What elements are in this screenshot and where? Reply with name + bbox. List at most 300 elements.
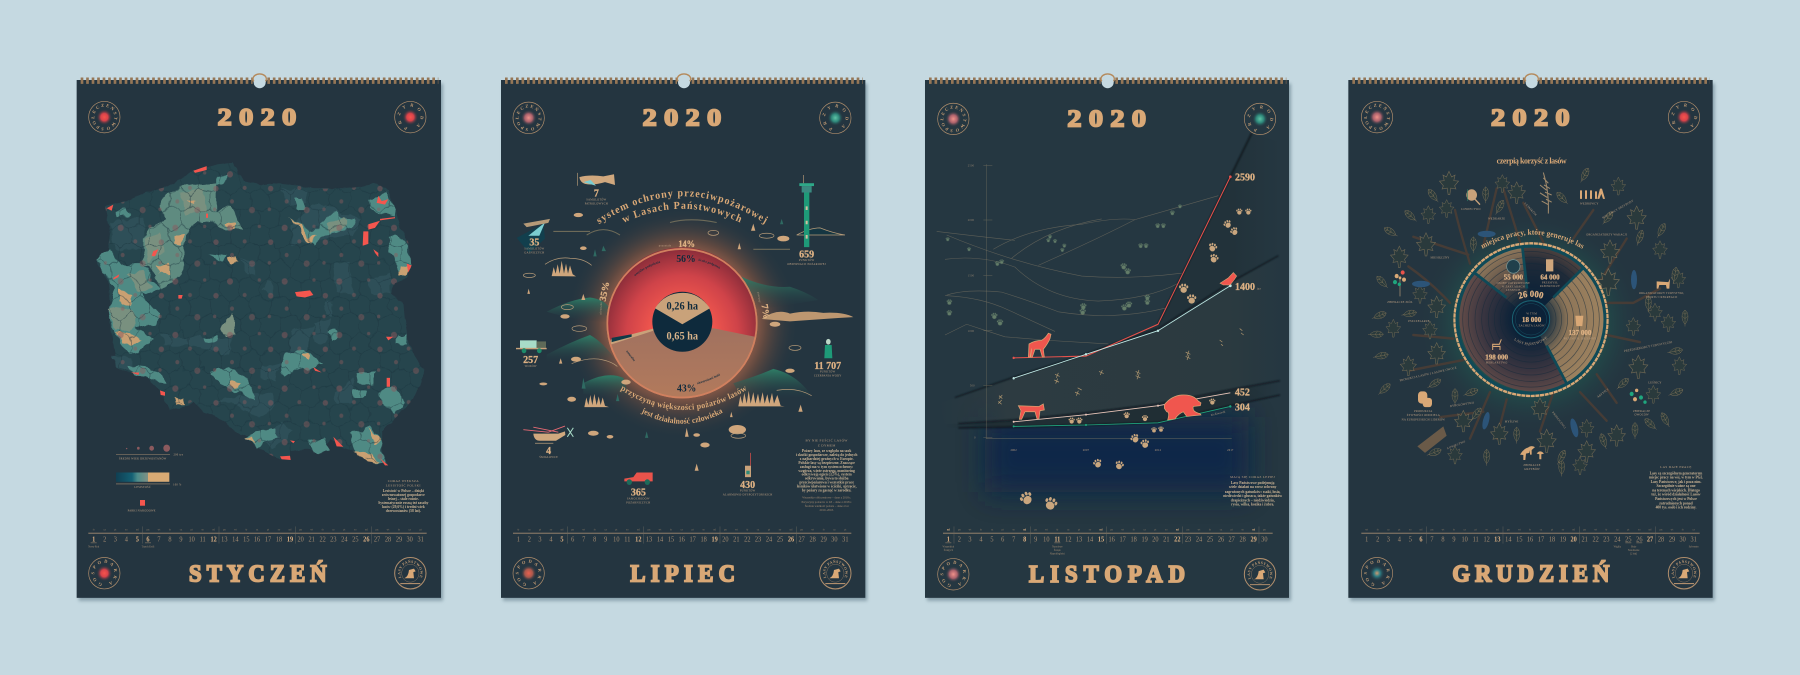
badge: gospodarka: GOSPODARKA xyxy=(91,560,117,586)
logo: Lasy Państwowe xyxy=(1244,558,1276,590)
calendar strip: listopad: pt xyxy=(1154,529,1157,532)
benefit labels: PRODUKCJA xyxy=(1414,409,1433,413)
calendar strip: grudzień: 17 xyxy=(1538,536,1545,543)
text block: coraz większa lesistość Polski: Systematycznie rosną też zasoby xyxy=(378,501,429,505)
calendar strip: styczeń: 23 xyxy=(330,536,337,543)
calendar strip: listopad: nd xyxy=(1252,529,1256,532)
labels: outer percentages xyxy=(598,239,771,320)
legend: stand age dots: 200 tys xyxy=(174,453,184,457)
benefit labels: MIŁOŚNICY PRZYRODY xyxy=(1601,197,1635,220)
calendar strip: lipiec: pt xyxy=(539,529,541,532)
benefit labels: ŁOWIECTWO xyxy=(1461,207,1481,211)
text block: coraz większa lesistość Polski: LESISTOŚĆ POLSKI xyxy=(386,482,421,487)
text block: las daje pracę: miejsc pracy na wsi, w tym w PGL xyxy=(1649,475,1703,480)
calendar strip: styczeń: so xyxy=(201,529,204,532)
calendar strip: lipiec: 30 xyxy=(831,536,838,543)
calendar strip: styczeń: pt xyxy=(267,529,269,532)
chart axes: 2012 xyxy=(1155,448,1162,452)
calendar strip: styczeń: so xyxy=(125,529,128,532)
benefit labels: RYBOŁÓWSTWO xyxy=(1450,399,1474,408)
calendar strip: listopad: cz xyxy=(1143,529,1147,532)
month title: LISTOPAD xyxy=(1029,561,1185,588)
legend: national parks: PARKI NARODOWE xyxy=(128,508,156,512)
calendar strip: listopad: pn xyxy=(1034,529,1038,532)
icon: watchtower xyxy=(799,175,814,247)
text block: coraz większa lesistość Polski: zrównoważonej gospodarce xyxy=(382,493,425,497)
calendar strip: listopad: so xyxy=(1165,529,1168,532)
calendar strip: lipiec: wt xyxy=(582,529,585,532)
calendar strip: listopad: nd xyxy=(1100,529,1103,532)
calendar strip: listopad: Narodowe xyxy=(1052,545,1063,549)
calendar strip: grudzień: wt xyxy=(1442,529,1445,532)
calendar strip: grudzień: 31 xyxy=(1691,536,1697,543)
calendar strip: grudzień: so xyxy=(1485,529,1488,532)
donut chart: causes of fires: nieostrożność ludzi xyxy=(697,373,720,384)
stat: 11 707 water points: 11 707 xyxy=(814,361,841,372)
calendar strip: styczeń: cz xyxy=(180,529,183,532)
series: red line 2590 xyxy=(1012,172,1255,359)
calendar strip: lipiec: so xyxy=(550,529,553,532)
text block: by nie puścić lasów z dymem: Pożary lasu, ze względu na szok xyxy=(802,449,852,453)
calendar strip: lipiec: nd xyxy=(637,529,640,532)
logo: Lasy Państwowe: LASY PAŃSTWOWE xyxy=(398,560,423,578)
chart axes: 2500 xyxy=(968,163,975,167)
calendar strip: styczeń: nd xyxy=(136,529,139,532)
text block: mają się coraz lepiej: niedźwiedzi i głuszca, także gatunków xyxy=(1223,494,1282,498)
calendar strip: styczeń: 29 xyxy=(396,536,402,543)
calendar strip: styczeń: wt xyxy=(158,529,161,532)
calendar strip: listopad: so xyxy=(1089,529,1092,532)
calendar strip: grudzień: 24 xyxy=(1614,536,1621,543)
text block: by nie puścić lasów z dymem: zasługi ma w tym system ochrony: xyxy=(800,465,853,469)
text block: by nie puścić lasów z dymem: Średnia wielkość pożaru – dane z lat xyxy=(805,503,849,508)
stat: 659 observation points: PUNKTÓW xyxy=(799,257,814,262)
calendar strip: listopad: 30 xyxy=(1261,536,1268,543)
calendar strip: styczeń: pn xyxy=(147,529,150,532)
calendar strip: listopad: pn xyxy=(1110,529,1114,532)
calendar strip: grudzień: 11 xyxy=(1473,536,1479,543)
calendar strip: styczeń: Trzech Króli xyxy=(142,545,155,549)
calendar strip: styczeń: 31 xyxy=(418,536,424,543)
calendar strip: lipiec: nd xyxy=(713,529,717,532)
benefit labels: ARTYŚCI xyxy=(1596,386,1609,399)
calendar strip: grudzień: 26 xyxy=(1636,536,1643,543)
calendar strip: grudzień: 18 xyxy=(1549,536,1556,543)
benefit labels: ORGANIZATORZY WAKACJI xyxy=(1586,233,1627,237)
badge: przyroda: PRZYRODA xyxy=(822,104,849,131)
text block: las daje pracę: też, że wśród działalność Lasów xyxy=(1651,493,1701,497)
badge: społeczeństwo: SPOŁECZEŃSTWO xyxy=(516,104,542,132)
calendar strip: styczeń: 24 xyxy=(341,536,348,543)
calendar strip: grudzień: nd xyxy=(1572,529,1576,532)
donut chart: causes of fires: naturalne xyxy=(625,349,637,363)
calendar strip: lipiec: 25 xyxy=(777,536,784,543)
heading: year: 2020 xyxy=(1491,105,1577,132)
calendar strip: grudzień: 3 xyxy=(1387,536,1391,543)
benefit labels: PRODUKCJA LASÓW I LASOWE OWOCE xyxy=(1399,364,1457,382)
center: average burned area: 0,65 ha xyxy=(667,330,699,342)
text block: by nie puścić lasów z dymem: BY NIE PUŚCIĆ LASÓW xyxy=(806,437,848,442)
calendar strip: grudzień: śr xyxy=(1605,529,1607,532)
calendar strip: styczeń: wt xyxy=(234,529,237,532)
text block: by nie puścić lasów z dymem: odkrywają ogień (3,5%), system xyxy=(802,473,852,477)
calendar strip: listopad: 21 xyxy=(1163,536,1169,543)
calendar strip: grudzień: 1 xyxy=(1365,536,1368,543)
text block: las daje pracę: Szczególnie ważne są one xyxy=(1656,484,1696,488)
badge: gospodarka: GOSPODARKA xyxy=(1364,560,1390,586)
sector: 198 000: MEBLARSTWO xyxy=(1486,360,1508,365)
calendar strip: listopad: 5 xyxy=(990,536,994,543)
calendar strip: grudzień: so xyxy=(1638,529,1641,532)
icon: firefighter xyxy=(824,339,832,358)
calendar strip: grudzień: nd xyxy=(1496,529,1499,532)
calendar strip: grudzień: Narodzenie xyxy=(1628,549,1640,552)
calendar strip: grudzień xyxy=(1361,526,1700,556)
calendar strip: styczeń: so xyxy=(278,529,281,532)
stat: 11 707 water points: PUNKTÓW xyxy=(820,368,835,374)
calendar strip: styczeń: 10 xyxy=(189,536,196,543)
calendar strip: listopad: 3 xyxy=(968,536,972,543)
calendar strip: grudzień: cz xyxy=(1692,529,1696,532)
chart axes: 0 xyxy=(974,435,976,440)
calendar strip: styczeń: 6 xyxy=(146,536,150,543)
text block: by nie puścić lasów z dymem: Polskie lasy są bezpieczne. Znaczące xyxy=(798,461,855,465)
glow behind chart xyxy=(566,207,799,439)
benefit labels: PSZCZELARZE xyxy=(1408,319,1430,323)
sector: 64 000: PRZEMYSŁ xyxy=(1542,280,1558,285)
text block: coraz większa lesistość Polski: CORAZ WIĘKSZA xyxy=(388,479,419,483)
series: green line 304 xyxy=(1013,402,1250,427)
calendar strip: lipiec: cz xyxy=(757,529,760,532)
text block: coraz większa lesistość Polski: lasów (29,6%) i średni wiek xyxy=(382,505,426,509)
logo: Lasy Państwowe: LASY PAŃSTWOWE xyxy=(1672,560,1696,578)
text block: las daje pracę xyxy=(1649,465,1703,510)
calendar strip: grudzień: 8 xyxy=(1441,536,1445,543)
calendar strip: styczeń: pt xyxy=(343,529,346,532)
legend: stand age dots xyxy=(116,445,184,461)
calendar strip: listopad: pt xyxy=(1078,529,1080,532)
text block: by nie puścić lasów z dymem: Wszystkie obliczeniowe – dane z 2018 r. xyxy=(802,495,851,500)
calendar strip: grudzień: 19 xyxy=(1560,536,1566,543)
curved title: system ochrony: system ochrony przeciwpożarowej xyxy=(597,191,768,225)
calendar strip: styczeń: 9 xyxy=(179,536,183,543)
text block: by nie puścić lasów z dymem: i skutki gospodarcze, należą do jednych xyxy=(796,453,858,457)
calendar strip: lipiec: 28 xyxy=(810,536,817,543)
calendar strip: styczeń: 18 xyxy=(276,536,283,543)
badge: przyroda: PRZYRODA xyxy=(1671,103,1698,130)
stat: 7 patrol planes: PATROLOWYCH xyxy=(585,201,609,205)
calendar strip: grudzień: cz xyxy=(1616,529,1619,532)
calendar strip: listopad: nd xyxy=(1023,529,1027,532)
calendar strip: lipiec: nd xyxy=(790,529,793,532)
calendar strip: lipiec: wt xyxy=(811,529,814,532)
calendar strip: lipiec: pt xyxy=(692,529,694,532)
calendar strip: listopad: śr xyxy=(1209,529,1211,532)
benefit labels: ŁOWIECTWO xyxy=(1447,439,1466,450)
calendar strip: grudzień: śr xyxy=(1682,529,1684,532)
calendar strip: grudzień: 2 xyxy=(1376,536,1379,543)
calendar strip: grudzień: 28 xyxy=(1658,536,1665,543)
calendar strip: lipiec: so xyxy=(626,529,629,532)
tree-trunk chart: jobs by sector xyxy=(1453,242,1609,398)
sector: 55 000: OSOBY ZATRUDNIONE xyxy=(1497,281,1530,285)
benefit labels: ZBIERACZE ZIÓŁ xyxy=(1387,299,1413,304)
calendar strip: styczeń: 5 xyxy=(136,536,140,543)
calendar strip: grudzień: wt xyxy=(1671,529,1674,532)
icon: small wolf xyxy=(1220,272,1237,285)
icon: mushrooms xyxy=(1520,446,1544,460)
calendar strip: styczeń: 19 xyxy=(287,536,294,543)
page sheet with spiral binding xyxy=(501,74,867,601)
stat: 35 firefighting planes: 35 xyxy=(529,237,539,249)
stat: 4 helicopters: ŚMIGŁOWCE xyxy=(539,454,558,459)
calendar strip: lipiec: pn xyxy=(571,529,575,532)
benefit labels: MIESIĘCZNY xyxy=(1430,255,1450,260)
calendar strip: lipiec: 7 xyxy=(582,536,586,543)
sector: 55 000 xyxy=(1497,260,1530,292)
calendar strip: grudzień: pt xyxy=(1398,529,1401,532)
panel: calendar page listopad (wildlife populations) xyxy=(925,73,1293,602)
chart axes: 2002 xyxy=(1010,448,1017,452)
calendar strip: grudzień: pt xyxy=(1475,529,1477,532)
series: cyan line 1400: 1400 xyxy=(1235,282,1255,293)
text block: las daje pracę: Lasy Państwowe, jak i poza nim. xyxy=(1651,480,1701,484)
month title: GRUDZIEŃ xyxy=(1452,561,1609,588)
calendar strip: listopad: wt xyxy=(1198,529,1201,532)
calendar strip: listopad: wt xyxy=(969,529,972,532)
calendar strip: lipiec: 9 xyxy=(604,536,607,543)
calendar strip: listopad: 17 xyxy=(1120,536,1127,543)
badge: społeczeństwo: SPOŁECZEŃSTWO xyxy=(940,106,966,132)
calendar strip: styczeń: 21 xyxy=(309,536,315,543)
calendar strip: listopad: 23 xyxy=(1185,536,1192,543)
small cross tracks xyxy=(998,329,1244,404)
page sheet with spiral binding xyxy=(77,74,443,601)
branches xyxy=(1408,189,1660,439)
calendar strip: grudzień: śr xyxy=(1377,529,1379,532)
calendar strip: lipiec: 31 xyxy=(842,536,848,543)
calendar strip: listopad: 6 xyxy=(1001,536,1005,543)
stat: 430 dispatch points xyxy=(723,480,773,496)
stat: 659 observation points: 659 xyxy=(799,249,814,261)
calendar strip: styczeń: pn xyxy=(223,529,226,532)
text block: by nie puścić lasów z dymem: odkrywania, bywa to służba xyxy=(805,477,849,481)
calendar strip: styczeń: nd xyxy=(365,529,368,532)
calendar strip: listopad: 15 xyxy=(1098,536,1105,543)
calendar strip: styczeń: cz xyxy=(332,529,335,532)
calendar strip: styczeń: śr xyxy=(93,529,95,532)
calendar strip: styczeń: Nowy Rok xyxy=(88,545,100,549)
stat: 365 patrol vehicles: POŻARNICZYCH xyxy=(626,499,651,505)
text block: mają się coraz lepiej xyxy=(1223,475,1282,507)
donut chart: causes of fires: 43% xyxy=(677,383,696,395)
series: cyan line 1400 xyxy=(1012,282,1261,379)
faint footprints xyxy=(946,204,1182,325)
calendar strip: grudzień: pn xyxy=(1507,529,1510,532)
donut chart: causes of fires: 56% xyxy=(676,254,696,265)
series: green line 304: niedźwiedź xyxy=(1210,409,1226,417)
calendar strip: lipiec: pt xyxy=(768,529,770,532)
logo: Lasy Państwowe xyxy=(1668,557,1700,590)
calendar strip: grudzień: Sylwester xyxy=(1689,545,1699,549)
sector: 137 000 xyxy=(1564,316,1597,340)
calendar strip: styczeń: 14 xyxy=(232,536,239,543)
icon: hikers xyxy=(1580,189,1605,199)
calendar strip: listopad: 8 xyxy=(1023,536,1027,543)
calendar strip: listopad: 11 xyxy=(1054,536,1060,543)
blue accent leaves xyxy=(1412,231,1637,438)
calendar strip: grudzień: 10 xyxy=(1462,536,1469,543)
icon: hunting bowl xyxy=(1466,189,1480,205)
calendar strip: grudzień: 4 xyxy=(1398,536,1402,543)
calendar strip: grudzień: cz xyxy=(1387,529,1390,532)
text block: coraz większa lesistość Polski xyxy=(378,479,429,513)
text block: by nie puścić lasów z dymem: leśników ułatwione w ścieżki, sprzęcie, xyxy=(797,484,857,489)
stat: 430 dispatch points: ALARMOWO-DYSPOZYTORSKICH xyxy=(723,492,773,496)
legend: stand age dots: ŚREDNI WIEK DRZEWOSTANÓW xyxy=(119,456,166,461)
icon: logs xyxy=(1417,426,1447,453)
calendar strip: styczeń: pn xyxy=(376,529,379,532)
stat: 257 trucks: 257 xyxy=(523,355,538,366)
center: average burned area: 0,26 ha xyxy=(667,300,699,312)
calendar strip: styczeń: cz xyxy=(408,529,412,532)
calendar strip: listopad: 19 xyxy=(1142,536,1148,543)
calendar strip: grudzień: 27 xyxy=(1647,536,1654,543)
calendar strip: grudzień: pt xyxy=(1627,529,1630,532)
calendar strip: listopad: 9 xyxy=(1034,536,1037,543)
legend: forest cover gradient: 100 % xyxy=(173,483,182,487)
chart axes xyxy=(968,163,1234,452)
calendar strip: grudzień: so xyxy=(1409,529,1412,532)
calendar strip: listopad: Wszystkich xyxy=(943,545,955,549)
text block: by nie puścić lasów z dymem: 2010–2018. xyxy=(820,508,834,512)
text block: las daje pracę: LAS DAJE PRACĘ xyxy=(1660,465,1692,469)
calendar strip: lipiec: pt xyxy=(844,529,847,532)
calendar strip: listopad: 25 xyxy=(1207,536,1214,543)
calendar strip: listopad: 22 xyxy=(1174,536,1180,543)
sector: 55 000: LEŚNYCH xyxy=(1506,287,1521,292)
calendar strip: listopad: pn xyxy=(1187,529,1190,532)
calendar strip: listopad: so xyxy=(1012,529,1015,532)
calendar strip: grudzień: wt xyxy=(1365,529,1368,532)
stat: 430 dispatch points: PUNKTÓW xyxy=(740,487,755,492)
calendar strip: listopad: 12 xyxy=(1065,536,1071,543)
calendar strip: lipiec: 27 xyxy=(799,536,806,543)
calendar strip: lipiec: 26 xyxy=(788,536,795,543)
stat: 11 707 water points: CZERPANIA WODY xyxy=(814,373,842,377)
calendar strip: listopad: śr xyxy=(1133,529,1135,532)
stat: 430 dispatch points: 430 xyxy=(740,480,755,491)
calendar strip: listopad: 13 xyxy=(1076,536,1083,543)
heading: czerpią korzyść z lasów: czerpią korzyść z lasów xyxy=(1497,156,1567,166)
calendar strip: styczeń: pt xyxy=(114,529,117,532)
panel: calendar page lipiec (fire protection) xyxy=(501,73,869,602)
stat: 365 patrol vehicles xyxy=(626,487,651,505)
calendar strip: listopad: Świętych xyxy=(944,549,954,552)
stat: 7 patrol planes: 7 xyxy=(594,188,599,200)
calendar strip: lipiec: cz xyxy=(833,529,836,532)
center: total jobs xyxy=(1512,301,1550,338)
calendar strip: lipiec: pn xyxy=(724,529,727,532)
benefit labels: ŻYWNOŚCI ODDZIELA xyxy=(1407,412,1441,417)
calendar strip: lipiec: 8 xyxy=(593,536,597,543)
calendar strip: listopad: pt xyxy=(1002,529,1004,532)
calendar strip: lipiec: pn xyxy=(648,529,651,532)
text block: mają się coraz lepiej: MAJĄ SIĘ CORAZ LEPIEJ xyxy=(1230,475,1275,479)
calendar strip: lipiec: wt xyxy=(735,529,738,532)
icon: fire truck xyxy=(516,340,547,353)
calendar strip: grudzień: so xyxy=(1562,529,1565,532)
text block: by nie puścić lasów z dymem: przeciwpożarowa i wszystkie prace xyxy=(799,480,854,485)
calendar strip: listopad: 18 xyxy=(1131,536,1138,543)
badge: przyroda: PRZYRODA xyxy=(397,103,424,130)
calendar strip: lipiec: 14 xyxy=(657,536,664,543)
stat: 7 patrol planes: SAMOLOTÓW xyxy=(586,196,606,201)
badge: gospodarka: GOSPODARKA xyxy=(516,560,542,586)
stat: 365 patrol vehicles: 365 xyxy=(631,487,646,499)
calendar strip: listopad: Święto xyxy=(1054,549,1061,552)
calendar strip: lipiec: 21 xyxy=(733,536,739,543)
calendar strip: styczeń: so xyxy=(354,529,357,532)
calendar strip: lipiec: 6 xyxy=(571,536,575,543)
donut chart: causes of fires xyxy=(606,248,758,398)
calendar strip: styczeń: 30 xyxy=(407,536,414,543)
calendar strip: lipiec: śr xyxy=(594,529,596,532)
calendar strip: listopad: wt xyxy=(1045,529,1048,532)
calendar strip: listopad: 2 xyxy=(958,536,961,543)
calendar strip: grudzień: Wigilia xyxy=(1614,545,1622,549)
benefit labels: GRZYBÓW xyxy=(1524,466,1540,471)
leaves around the tree xyxy=(1368,166,1688,476)
contour lines xyxy=(937,196,1218,344)
benefit labels: SPORTU I REKREACJI xyxy=(1646,295,1678,299)
footprints xyxy=(1018,209,1251,512)
calendar strip: styczeń: nd xyxy=(289,529,292,532)
calendar strip: listopad: wt xyxy=(1121,529,1124,532)
series: pink line 452 xyxy=(1013,387,1250,423)
calendar strip: grudzień: 20 xyxy=(1571,536,1578,543)
calendar strip: styczeń: 28 xyxy=(385,536,392,543)
benefit labels: ZBIERACZE xyxy=(1523,463,1541,467)
badge: przyroda: PRZYRODA xyxy=(1247,105,1274,132)
calendar strip: styczeń: 1 xyxy=(92,536,95,543)
calendar strip: grudzień: śr xyxy=(1529,529,1531,532)
calendar strip: styczeń: pt xyxy=(191,529,193,532)
calendar strip: lipiec: 23 xyxy=(755,536,762,543)
calendar strip: styczeń: 2 xyxy=(103,536,106,543)
text block: las daje pracę: Państwowych jest w Polsce xyxy=(1655,497,1697,501)
benefit labels: MYŚLIWI xyxy=(1505,418,1519,424)
calendar strip: listopad: 28 xyxy=(1240,536,1247,543)
center: total jobs: ZACHĘTA LASÓW xyxy=(1519,322,1545,327)
calendar strip: listopad: Niepodległości xyxy=(1050,553,1065,556)
series: cyan line 1400: jęz xyxy=(1256,287,1261,291)
calendar strip: styczeń: 13 xyxy=(221,536,228,543)
chart axes: 1500 xyxy=(968,273,975,277)
chart axes: 2007 xyxy=(1083,448,1090,452)
sector: 137 000: PRZEMYSŁ DRZEWNY xyxy=(1564,336,1597,340)
text block: las daje pracę: na terenach wiejskich. Dlatego xyxy=(1652,488,1700,492)
curved heading: miejsca pracy: miejsca pracy, które generuje las xyxy=(1481,229,1584,249)
text block: by nie puścić lasów z dymem: Z DYMEM xyxy=(818,443,836,447)
text block: coraz większa lesistość Polski: leśnej – stale rośnie. xyxy=(388,497,419,501)
calendar strip: styczeń: cz xyxy=(103,529,107,532)
text block: by nie puścić lasów z dymem: wzgórza, wieże ostrzegą, monitoring xyxy=(798,469,855,473)
text block: coraz większa lesistość Polski: drzewostanów (58 lat). xyxy=(386,509,421,513)
chart axes: 500 xyxy=(970,383,975,387)
heading: year: 2020 xyxy=(218,104,304,131)
labels: outer percentages: 14% xyxy=(678,239,695,249)
